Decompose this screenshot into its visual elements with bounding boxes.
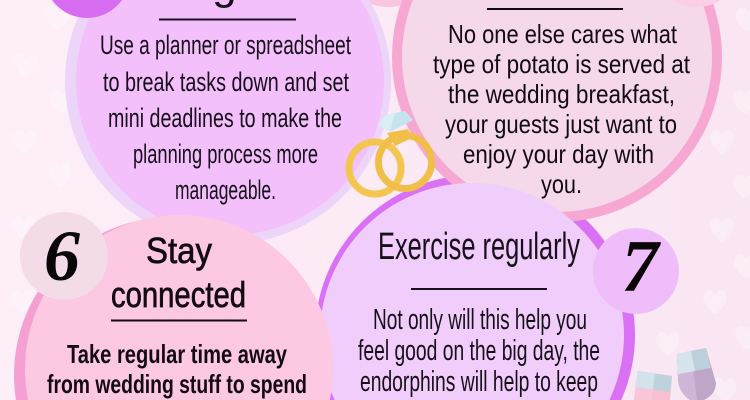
tip 7 text: endorphins will help to keep <box>360 366 598 398</box>
tip 7 text: feel good on the big day, the <box>358 335 600 367</box>
tip 7 text <box>358 304 600 398</box>
tip 5 text: the wedding breakfast, <box>448 79 675 109</box>
ring of tip 7 circle <box>315 175 635 400</box>
panel: tip 4 inner circle <box>76 0 384 235</box>
tip 5 text: enjoy your day with <box>463 139 654 169</box>
tip 6 heading <box>111 230 247 322</box>
badge: tip 6 <box>20 212 108 300</box>
tip 4 text: mini deadlines to make the <box>108 103 342 133</box>
tip 4 text <box>100 30 351 205</box>
panel: tip 5 inner circle <box>402 0 712 212</box>
tip 5 text: No one else cares what <box>448 19 678 49</box>
badge: tip 6: 6 <box>44 216 80 296</box>
tip 4 text: to break tasks down and set <box>103 67 349 97</box>
panel: tip 6 inner circle <box>25 215 333 400</box>
tip 6 text <box>47 339 307 399</box>
tip 7 text: Not only will this help you <box>373 304 587 336</box>
ring of tip 6 circle <box>14 217 330 400</box>
badge: tip 7 <box>593 226 679 314</box>
badge: tip 5 <box>654 0 740 7</box>
tip 5 text: type of potato is served at <box>433 49 691 79</box>
tip 5 heading underline <box>487 8 623 10</box>
panel: tip 4 outer circle <box>65 0 391 244</box>
badge: tip 4 <box>44 0 130 18</box>
tip 4 text: manageable. <box>175 175 276 205</box>
icon: wine glasses <box>634 348 716 400</box>
tip 6 heading: Stay <box>146 230 212 271</box>
decorative pink shape at top centre <box>362 0 414 7</box>
panel: tip 5 outer circle <box>392 0 722 222</box>
tip 4 text: Use a planner or spreadsheet <box>100 30 351 60</box>
tip 6 heading: connected <box>111 274 246 315</box>
tip 6 text: from wedding stuff to spend <box>47 369 307 399</box>
tip 5 text: your guests just want to <box>445 109 677 139</box>
panel: tip 7 inner circle <box>320 183 624 400</box>
tip 5 text: you. <box>541 169 582 199</box>
tip 4 text: planning process more <box>133 139 318 169</box>
tip 6 text: Take regular time away <box>67 339 287 369</box>
tip 5 text <box>433 19 691 199</box>
badge: tip 7: 7 <box>622 226 662 308</box>
icon: wedding rings <box>349 111 432 194</box>
tip 7 heading: Exercise regularly <box>378 226 580 268</box>
